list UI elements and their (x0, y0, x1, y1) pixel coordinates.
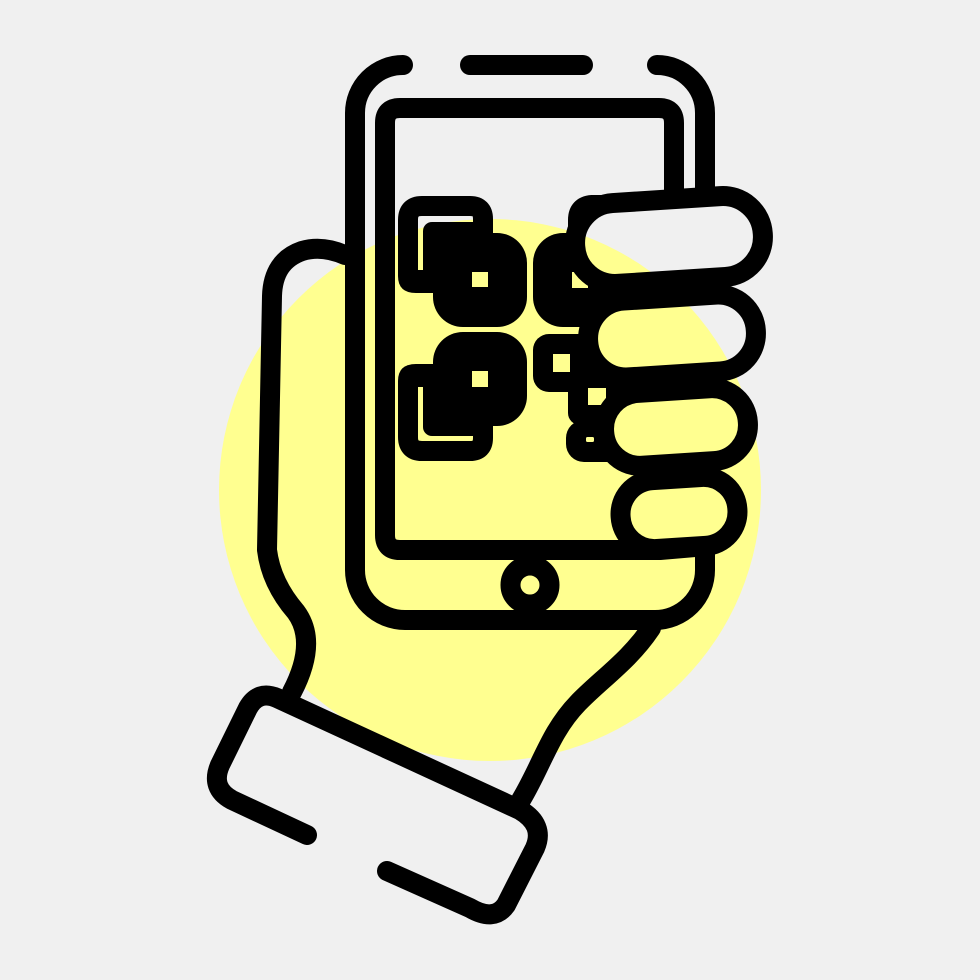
app icon: lower right (566, 420, 626, 462)
yellow circle (219, 219, 761, 761)
finger 2 (586, 292, 758, 380)
finger 4 (618, 475, 740, 551)
hand: right edge of wrist (521, 628, 651, 800)
fingers (573, 194, 765, 551)
app icons (398, 205, 628, 462)
app icon: top left (398, 206, 527, 327)
illustration: hand holding smartphone (206, 55, 773, 924)
phone speaker (470, 55, 583, 75)
finger interiors (585, 206, 712, 451)
hand: thumb and left edge (267, 249, 345, 692)
finger 3 (602, 386, 750, 468)
shirt cuff (217, 696, 538, 914)
app icon: middle right (533, 334, 628, 425)
app icon: bottom left (398, 332, 527, 451)
phone screen (385, 108, 695, 550)
home button (510, 566, 550, 604)
app icon: top right (533, 233, 627, 327)
finger 1 (573, 194, 765, 286)
phone outer body (355, 65, 705, 620)
app icon: corner behind index finger (578, 205, 625, 240)
